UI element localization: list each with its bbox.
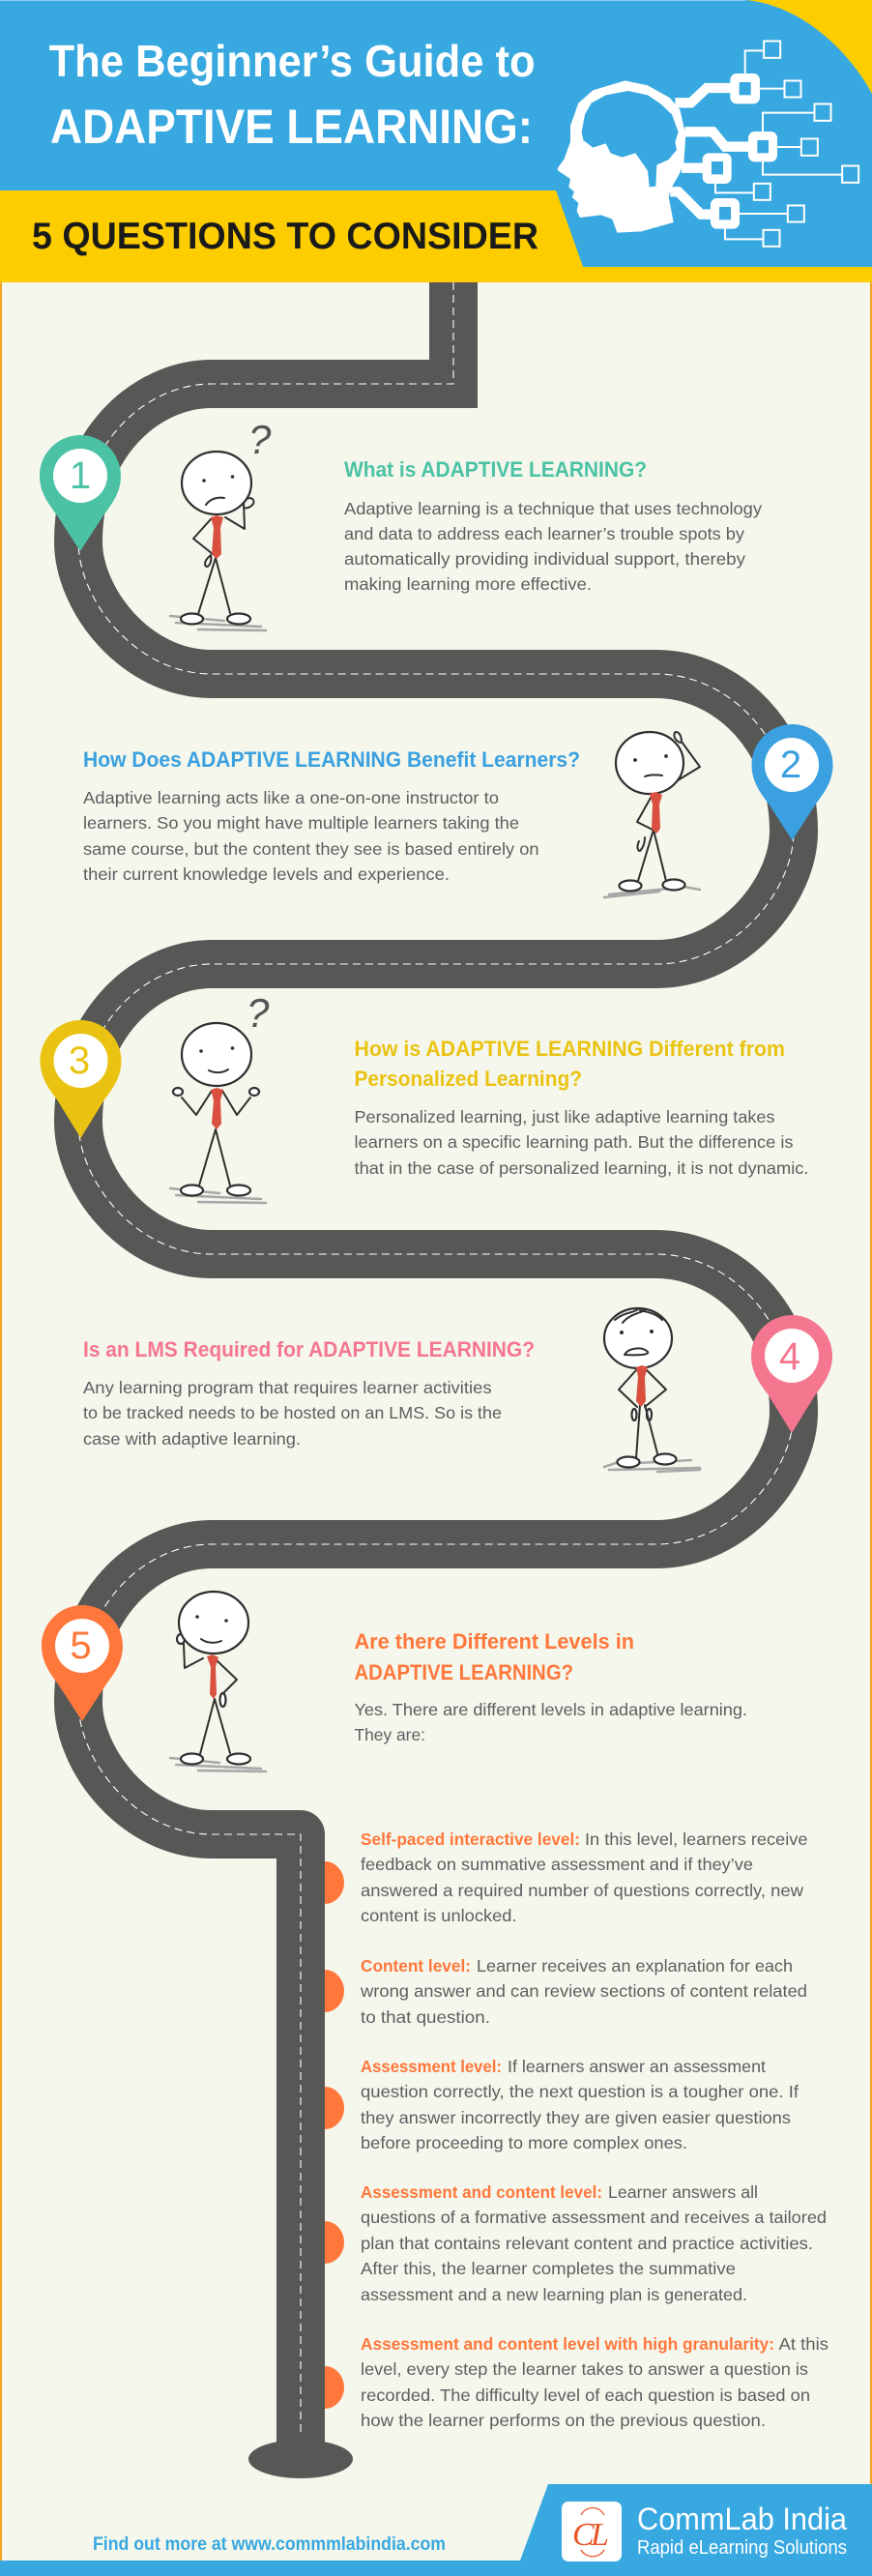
level 2 text: Learner receives an explanation for each [477,1956,793,1976]
header banner [0,0,872,282]
question 2 text: How Does ADAPTIVE LEARNING Benefit Learners? [83,747,580,772]
level 5 text: Assessment and content level with high granularity: [361,2334,774,2354]
icon: head with network nodes [558,41,858,247]
question 1 text: making learning more effective. [344,574,592,594]
winding road [78,282,794,2478]
level 4 text: Assessment and content level: [361,2182,602,2202]
level 3 text: before proceeding to more complex ones. [361,2133,687,2152]
question 5 text: They are: [354,1725,425,1744]
level 2 text: Content level: [361,1956,471,1976]
level 2 text: to that question. [361,2007,490,2027]
level 3 text: Assessment level: [361,2057,502,2076]
figure 3: shrugging stick man [170,990,270,1203]
question 2 text: learners. So you might have multiple learners taking the [83,813,519,833]
logo: CommLab India: C [572,2517,595,2553]
level 4 text: questions of a formative assessment and receives a tailored [361,2208,827,2227]
title [49,36,536,154]
question 3 text: learners on a specific learning path. But the difference is [354,1132,794,1152]
level 1 text: Self-paced interactive level: [361,1830,580,1849]
question 2 text: same course, but the content they see is based entirely on [83,839,539,859]
footer panel [0,2484,872,2576]
pin 3 [41,1020,122,1138]
question 4 text: to be tracked needs to be hosted on an LMS. So is the [83,1403,502,1422]
level 3 text: question correctly, the next question is a tougher one. If [361,2082,799,2101]
question 3 text: that in the case of personalized learning, it is not dynamic. [354,1158,808,1178]
question 1 text: and data to address each learner’s trouble spots by [344,524,744,543]
level 3 text [361,2057,799,2152]
question 3 text [354,1037,808,1178]
subtitle: 5 QUESTIONS TO CONSIDER [32,216,538,257]
pin 1: 1 [70,454,91,497]
level 4 text: Learner answers all [608,2182,758,2202]
question 2 text: Adaptive learning acts like a one-on-one instructor to [83,788,499,807]
figure 3: shrugging stick man: ? [247,990,270,1036]
level 3 text: If learners answer an assessment [508,2057,766,2076]
level 4 text: assessment and a new learning plan is generated. [361,2285,747,2304]
question 4 text: case with adaptive learning. [83,1429,301,1449]
question 4 text: Any learning program that requires learner activities [83,1378,492,1397]
logo: CommLab India: Rapid eLearning Solutions [637,2537,847,2559]
pin 5: 5 [70,1625,92,1667]
figure 4: worried stick man [604,1308,700,1472]
level 5 text: level, every step the learner takes to answer a question is [361,2359,808,2379]
level 2 text: wrong answer and can review sections of content related [360,1981,807,2001]
title: The Beginner’s Guide to [49,36,536,86]
figure 5: pondering stick man [170,1592,266,1771]
question 5 text [354,1629,747,1744]
title: ADAPTIVE LEARNING: [50,100,533,154]
level 5 text: recorded. The difficulty level of each question is based on [361,2386,810,2405]
pin 4 [751,1315,832,1433]
level 5 text: how the learner performs on the previous question. [361,2411,766,2430]
question 1 text: automatically providing individual support, thereby [344,549,745,569]
question 2 text [83,747,580,884]
logo: CommLab India [562,2502,847,2561]
pin 3: 3 [69,1039,90,1082]
level 1 text [361,1830,808,1925]
pin 4: 4 [779,1335,800,1378]
footer link: Find out more at www.commmlabindia.com [93,2534,446,2555]
question 1 text [344,457,762,594]
level 5 text [361,2334,828,2430]
question 1 text: Adaptive learning is a technique that uses technology [344,499,762,518]
question 5 text: ADAPTIVE LEARNING? [354,1660,573,1684]
level 3 text: they answer incorrectly they are given easier questions [361,2108,791,2127]
figure 2: head-scratching stick man [604,732,700,897]
question 1 text: What is ADAPTIVE LEARNING? [344,457,647,482]
level 1 text: feedback on summative assessment and if they’ve [361,1855,753,1874]
level 5 text: At this [779,2334,828,2354]
question 3 text: Personalized learning, just like adaptive learning takes [354,1107,775,1127]
figure 1: thinking stick man: ? [248,417,272,462]
question 4 text [83,1337,535,1449]
question 3 text: How is ADAPTIVE LEARNING Different from [354,1037,785,1061]
level markers [325,1861,344,2409]
level 2 text [360,1956,807,2027]
pin 2: 2 [780,744,801,786]
question 2 text: their current knowledge levels and experience. [83,864,450,884]
question 3 text: Personalized Learning? [354,1067,582,1091]
level 4 text: After this, the learner completes the summative [361,2259,736,2278]
level 1 text: content is unlocked. [361,1906,516,1925]
pin 2 [752,724,833,840]
question 4 text: Is an LMS Required for ADAPTIVE LEARNING? [83,1337,535,1361]
logo: CommLab India: CommLab India [637,2502,847,2536]
logo: CommLab India: L [590,2517,609,2553]
pin 1 [40,435,121,551]
level 1 text: answered a required number of questions correctly, new [361,1881,803,1900]
figure 1: thinking stick man [170,417,272,630]
question 5 text: Yes. There are different levels in adaptive learning. [354,1700,747,1719]
level 1 text: In this level, learners receive [585,1830,808,1849]
level 4 text [361,2182,827,2304]
pin 5 [42,1605,123,1721]
question 5 text: Are there Different Levels in [354,1629,634,1654]
level 4 text: plan that contains relevant content and practice activities. [361,2234,813,2253]
